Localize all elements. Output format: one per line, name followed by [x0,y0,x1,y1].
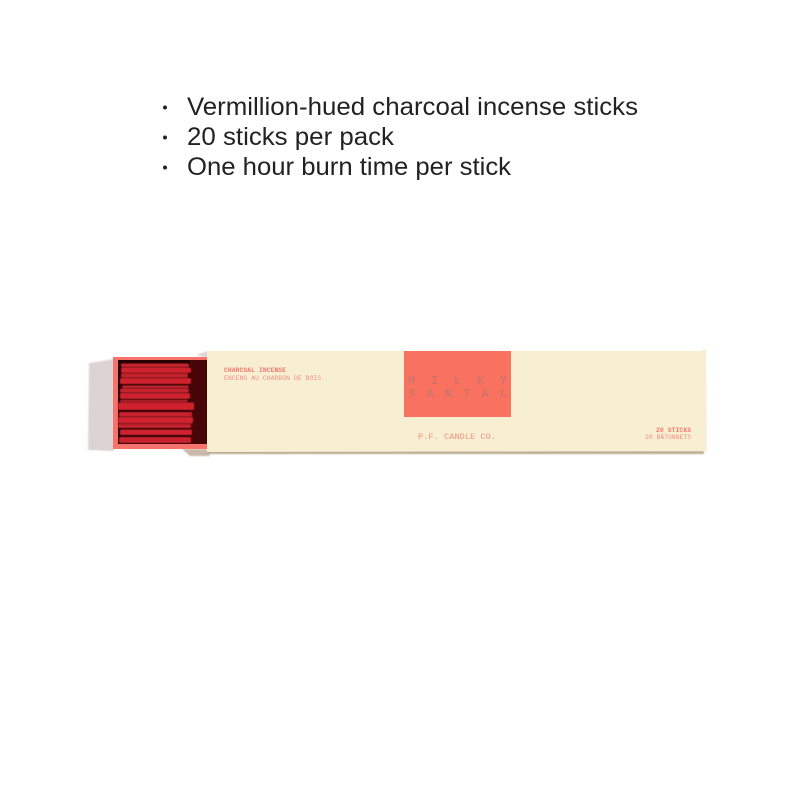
incense sticks [118,364,194,443]
text: stick count [645,427,691,441]
bullet: 20 sticks per pack: 20 sticks per pack [187,123,395,151]
cast shadow [88,351,704,456]
product: incense box [88,349,707,456]
text: stick count: 20 STICKS [656,427,691,434]
feature list [163,93,638,181]
text: charcoal incense: ENCENS AU CHARBON DE BOIS [224,375,321,382]
text: stick count: 20 BÂTONNETS [645,433,691,441]
box sleeve [207,349,707,452]
text: charcoal incense: CHARCOAL INCENSE [224,367,286,374]
label: Milky Santal [404,351,511,417]
bullet: Vermillion-hued charcoal incense sticks: Vermillion-hued charcoal incense sticks [187,93,638,121]
text: charcoal incense [224,367,321,382]
bullet: One hour burn time per stick: One hour burn time per stick [187,153,512,181]
label: Milky Santal: MILKY [408,374,508,388]
text: brand: P.F. CANDLE CO. [418,432,496,442]
open tray [113,357,208,449]
label: Milky Santal: SANTAL [408,387,507,401]
